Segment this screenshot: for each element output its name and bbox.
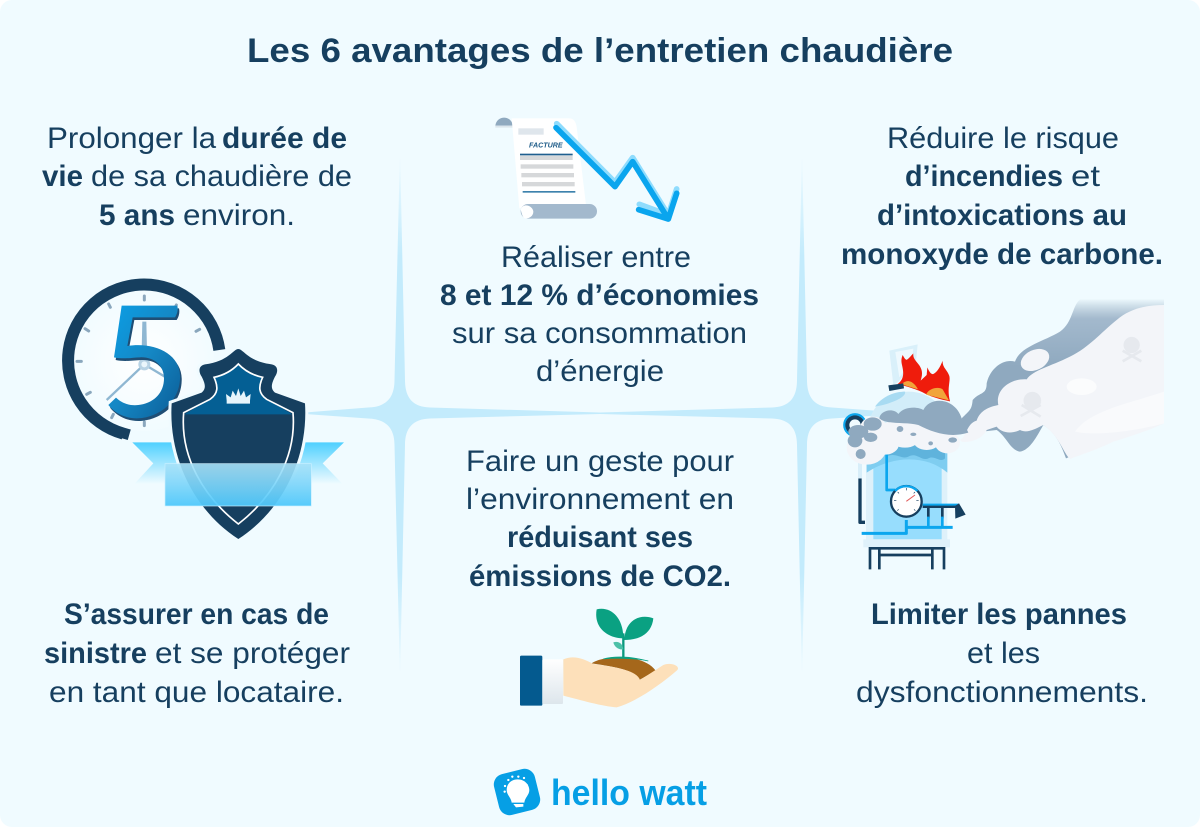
text block: pannes: et les — [967, 637, 1040, 670]
ribbon band — [165, 464, 311, 506]
text block: économies — [440, 241, 759, 388]
text block: environnement: Faire un geste pour — [466, 445, 734, 478]
smoke clouds around the boiler — [847, 401, 968, 465]
text block: environnement: émissions de CO2. — [469, 560, 731, 593]
skull marks — [1021, 337, 1141, 417]
text block: incendies: d’intoxications au — [877, 199, 1127, 232]
invoice label: FACTURE — [529, 141, 564, 150]
title: Les 6 avantages de l’entretien chaudière — [247, 32, 953, 70]
ribbon tails — [132, 442, 344, 484]
soil — [592, 657, 656, 680]
text block: incendies — [841, 122, 1163, 271]
text block: sinistre: en tant que locataire. — [49, 676, 344, 709]
logo icon — [492, 767, 542, 817]
pipes — [844, 414, 959, 533]
text block: environnement: réduisant ses — [507, 521, 693, 554]
logo: hello watt — [492, 767, 707, 817]
outlet nozzle — [955, 503, 966, 519]
number five — [108, 306, 182, 421]
shield — [171, 349, 305, 539]
cross-shaped separators — [305, 150, 900, 680]
falling arrow — [556, 124, 677, 219]
text block: pannes: Limiter les pannes — [871, 598, 1127, 631]
text block: sinistre — [44, 598, 350, 709]
sleeve — [520, 656, 563, 706]
text block: environnement: l’environnement en — [466, 483, 734, 516]
text block: incendies: Réduire le risque — [887, 122, 1119, 155]
text block: environnement — [466, 445, 734, 593]
text block: sinistre: et se protéger — [155, 637, 350, 670]
smoke plume — [960, 299, 1164, 459]
text block: économies: 8 et 12 % d’économies — [440, 279, 759, 312]
text block: économies: Réaliser entre — [501, 241, 691, 274]
flames — [898, 353, 950, 401]
seedling — [596, 609, 653, 661]
text block: incendies: et — [1071, 160, 1101, 193]
gauge — [891, 486, 922, 517]
text block: pannes: dysfonctionnements. — [856, 676, 1148, 709]
text block: durée de vie: 5 ans — [99, 199, 175, 232]
text block: durée de vie: environ. — [183, 199, 295, 232]
text block: économies: sur sa consommation — [452, 317, 747, 350]
text block: durée de vie — [42, 122, 352, 232]
text block: durée de vie: Prolonger la — [47, 122, 216, 155]
clock — [68, 285, 219, 438]
text block: sinistre: sinistre — [44, 637, 147, 670]
boiler body — [863, 383, 950, 547]
text block: durée de vie: durée de — [222, 122, 347, 155]
text block: économies: d’énergie — [536, 355, 664, 388]
text block: incendies: d’incendies — [905, 160, 1063, 193]
boiler stand — [870, 548, 944, 569]
text block: durée de vie: vie — [42, 160, 83, 193]
text block: pannes — [856, 598, 1148, 709]
text block: durée de vie: de sa chaudière de — [91, 160, 352, 193]
hand — [563, 657, 678, 707]
icon: hand holding a seedling — [520, 609, 678, 707]
logo wordmark: hello watt — [551, 772, 707, 813]
text block: sinistre: S’assurer en cas de — [64, 598, 329, 631]
chimney — [889, 344, 918, 385]
icon: invoice with falling arrow — [495, 118, 677, 219]
icon: clock, five and shield — [68, 285, 344, 539]
invoice paper — [495, 118, 597, 219]
icon: boiler on fire with smoke — [844, 299, 1164, 569]
text block: incendies: monoxyde de carbone. — [841, 238, 1163, 271]
